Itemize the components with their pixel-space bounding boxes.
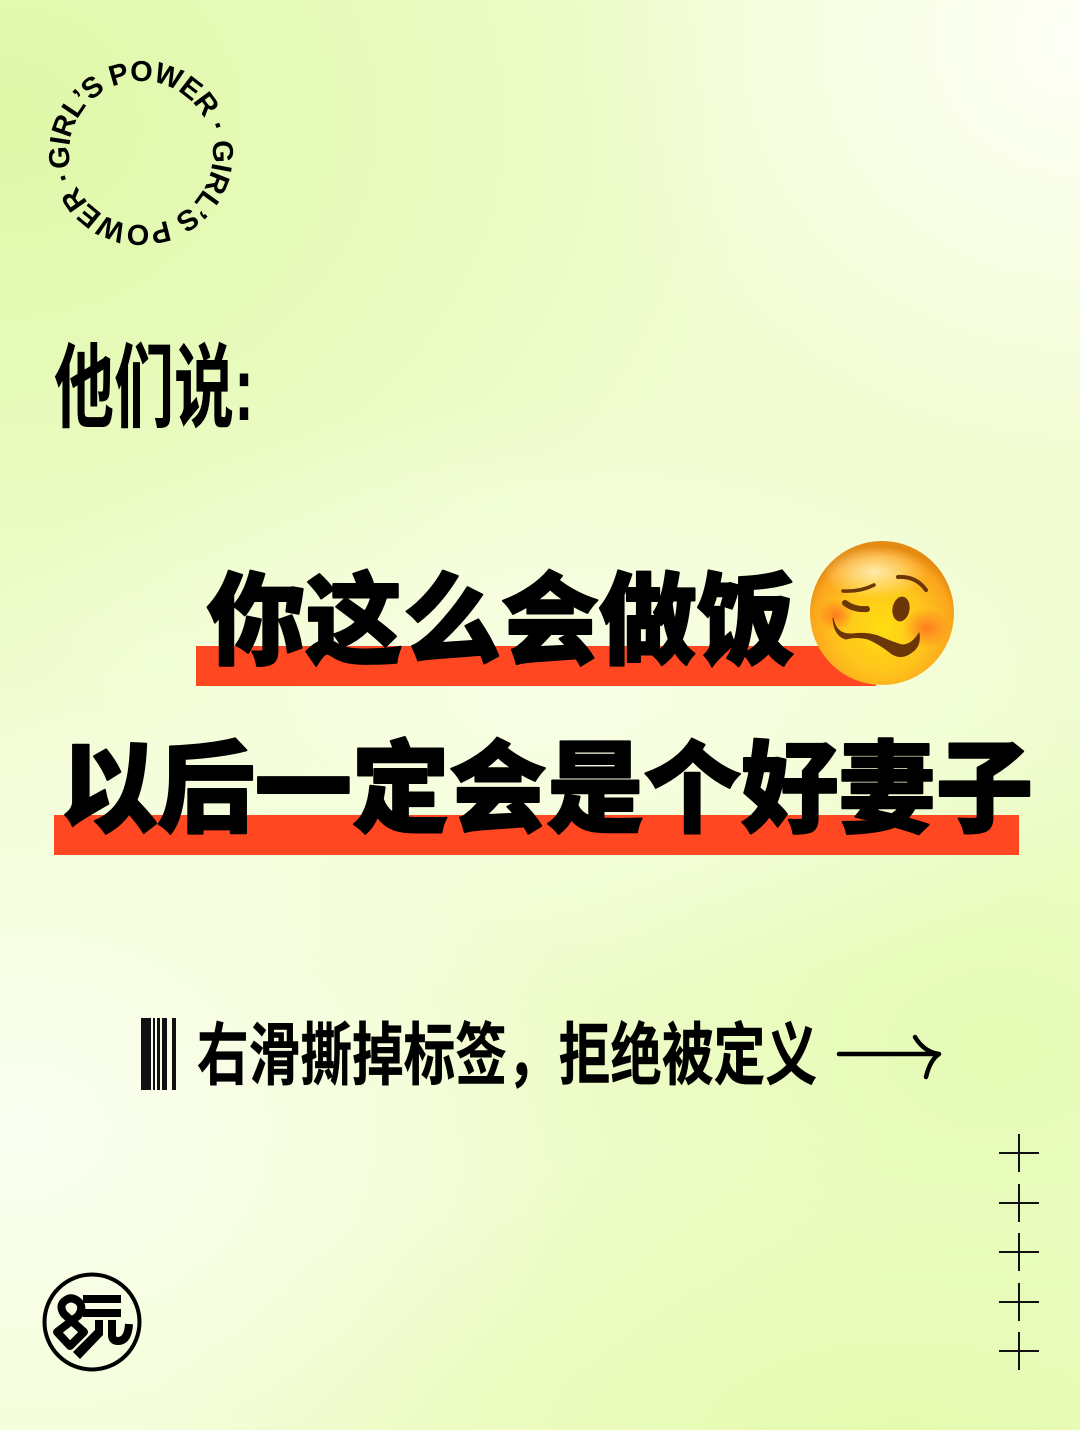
logo: round seal [44,1274,140,1370]
heading: they say: 他们说: [54,338,254,440]
decoration: plus column [999,1134,1039,1370]
call to action text: 右滑撕掉标签，拒绝被定义 [197,1018,817,1094]
title line one: 你这么会做饭 [207,566,795,678]
title line two: 以后一定会是个好妻子 [60,734,1033,846]
highlight bar: line one [196,646,876,686]
circular badge: GIRL'S POWER: GIRL’S POWER · GIRL’S POWER · [48,60,234,246]
icon: barcode [141,1018,176,1090]
arrow [839,1037,939,1077]
icon: woozy face emoji [810,541,954,685]
highlight bar: line two [54,815,1019,855]
